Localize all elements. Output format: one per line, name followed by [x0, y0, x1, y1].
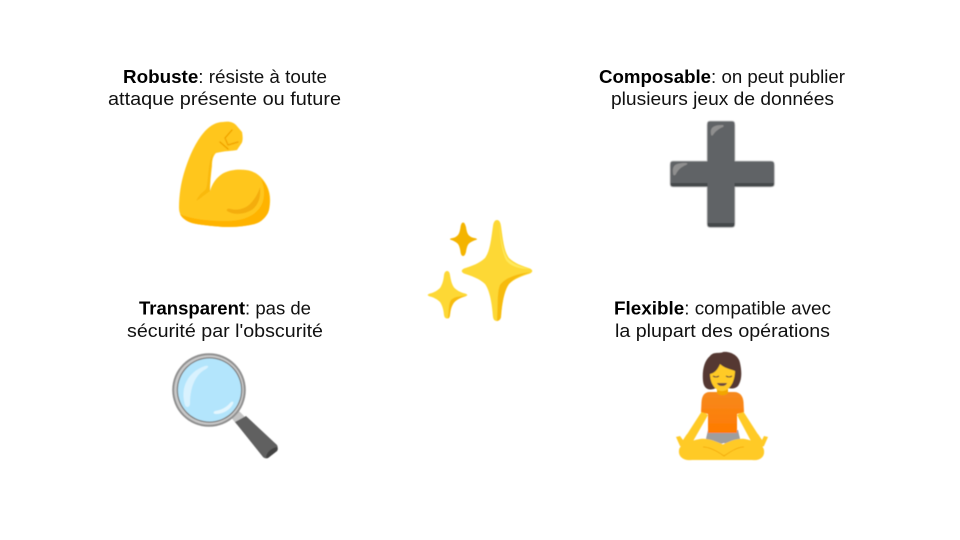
eyes and mouth: [713, 376, 732, 377]
hands: [676, 434, 696, 450]
text: Transparent: [127, 298, 323, 341]
text: Composable: Composable: on peut publier: [599, 66, 845, 87]
icon: flexed biceps: [179, 122, 270, 227]
text: Transparent: Transparent: pas de: [139, 298, 311, 318]
text: Robuste: attaque présente ou future: [108, 88, 341, 109]
shirt: [701, 392, 744, 433]
text: Flexible: la plupart des opérations: [615, 320, 830, 341]
icon: sparkles: [428, 220, 532, 321]
text: Flexible: Flexible: compatible avec: [614, 298, 831, 318]
icon: plus sign: [670, 121, 774, 228]
hair: [703, 352, 741, 390]
shorts: [705, 430, 741, 446]
face: [710, 364, 735, 391]
text: Transparent: sécurité par l'obscurité: [127, 320, 323, 341]
icon: person in lotus position: [676, 352, 768, 460]
text: Composable: [599, 66, 845, 109]
text: Composable: plusieurs jeux de données: [611, 88, 834, 109]
text: Robuste: [108, 66, 341, 109]
text: Robuste: Robuste: résiste à toute: [123, 66, 327, 87]
icon: magnifying glass: [172, 353, 278, 458]
legs: [679, 439, 740, 460]
text: Flexible: [614, 298, 831, 341]
arms: [684, 411, 708, 443]
neck: [717, 387, 728, 395]
